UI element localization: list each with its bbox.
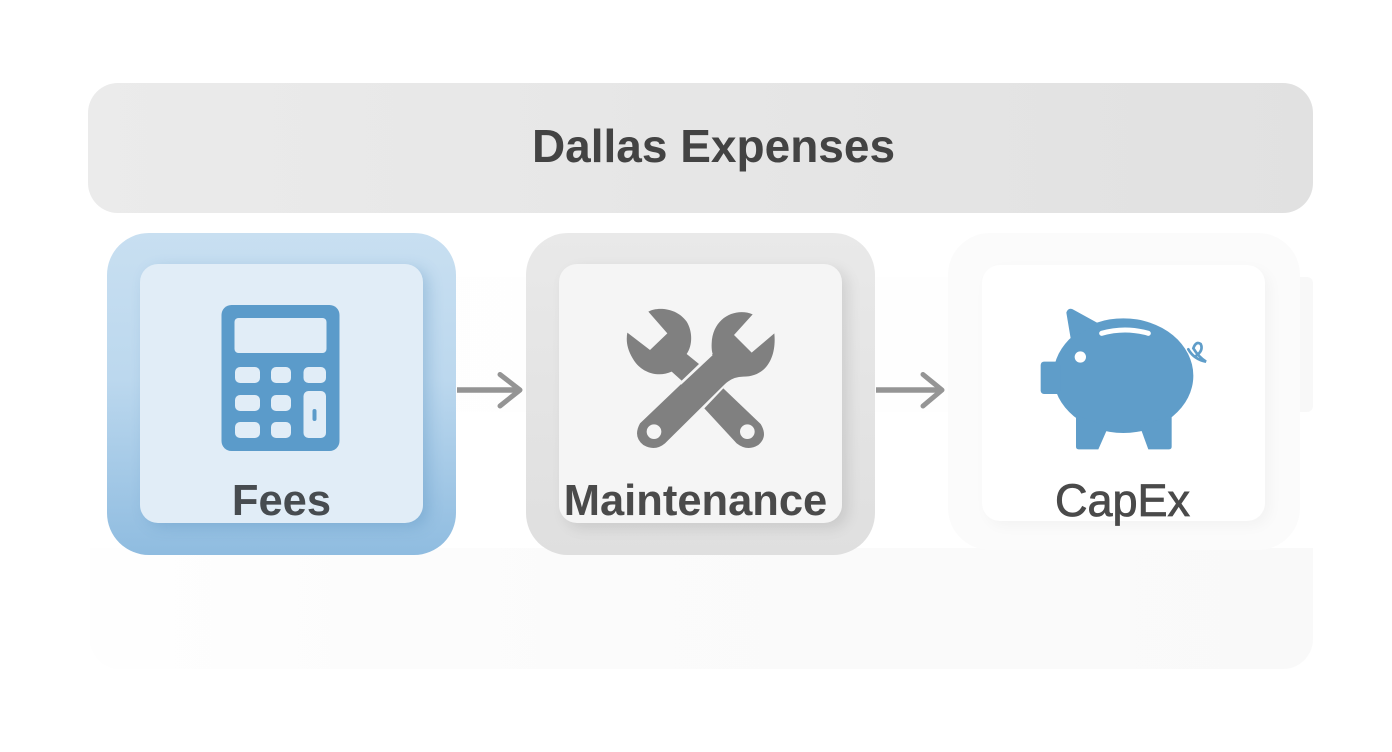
fees inner tile	[140, 264, 423, 523]
arrow: fees to maintenance	[457, 372, 522, 408]
title: Dallas Expenses	[532, 120, 895, 172]
label: Fees: Fees	[232, 477, 331, 525]
panel: maintenance card	[526, 233, 875, 555]
icon: crossed wrenches	[626, 308, 775, 448]
arrow: maintenance to capex	[876, 372, 944, 408]
panel: faint bottom band	[90, 548, 1313, 669]
icon: calculator	[222, 305, 340, 451]
maintenance inner tile	[559, 264, 842, 523]
label: Maintenance: Maintenance	[564, 477, 827, 525]
panel: faint middle band	[96, 277, 1313, 412]
icon: piggy bank	[1040, 308, 1207, 450]
panel: capex card	[948, 233, 1300, 550]
panel: fees card	[107, 233, 456, 555]
capex inner tile	[982, 265, 1265, 521]
label: CapEx: CapEx	[1055, 475, 1190, 526]
panel: title banner	[88, 83, 1313, 213]
